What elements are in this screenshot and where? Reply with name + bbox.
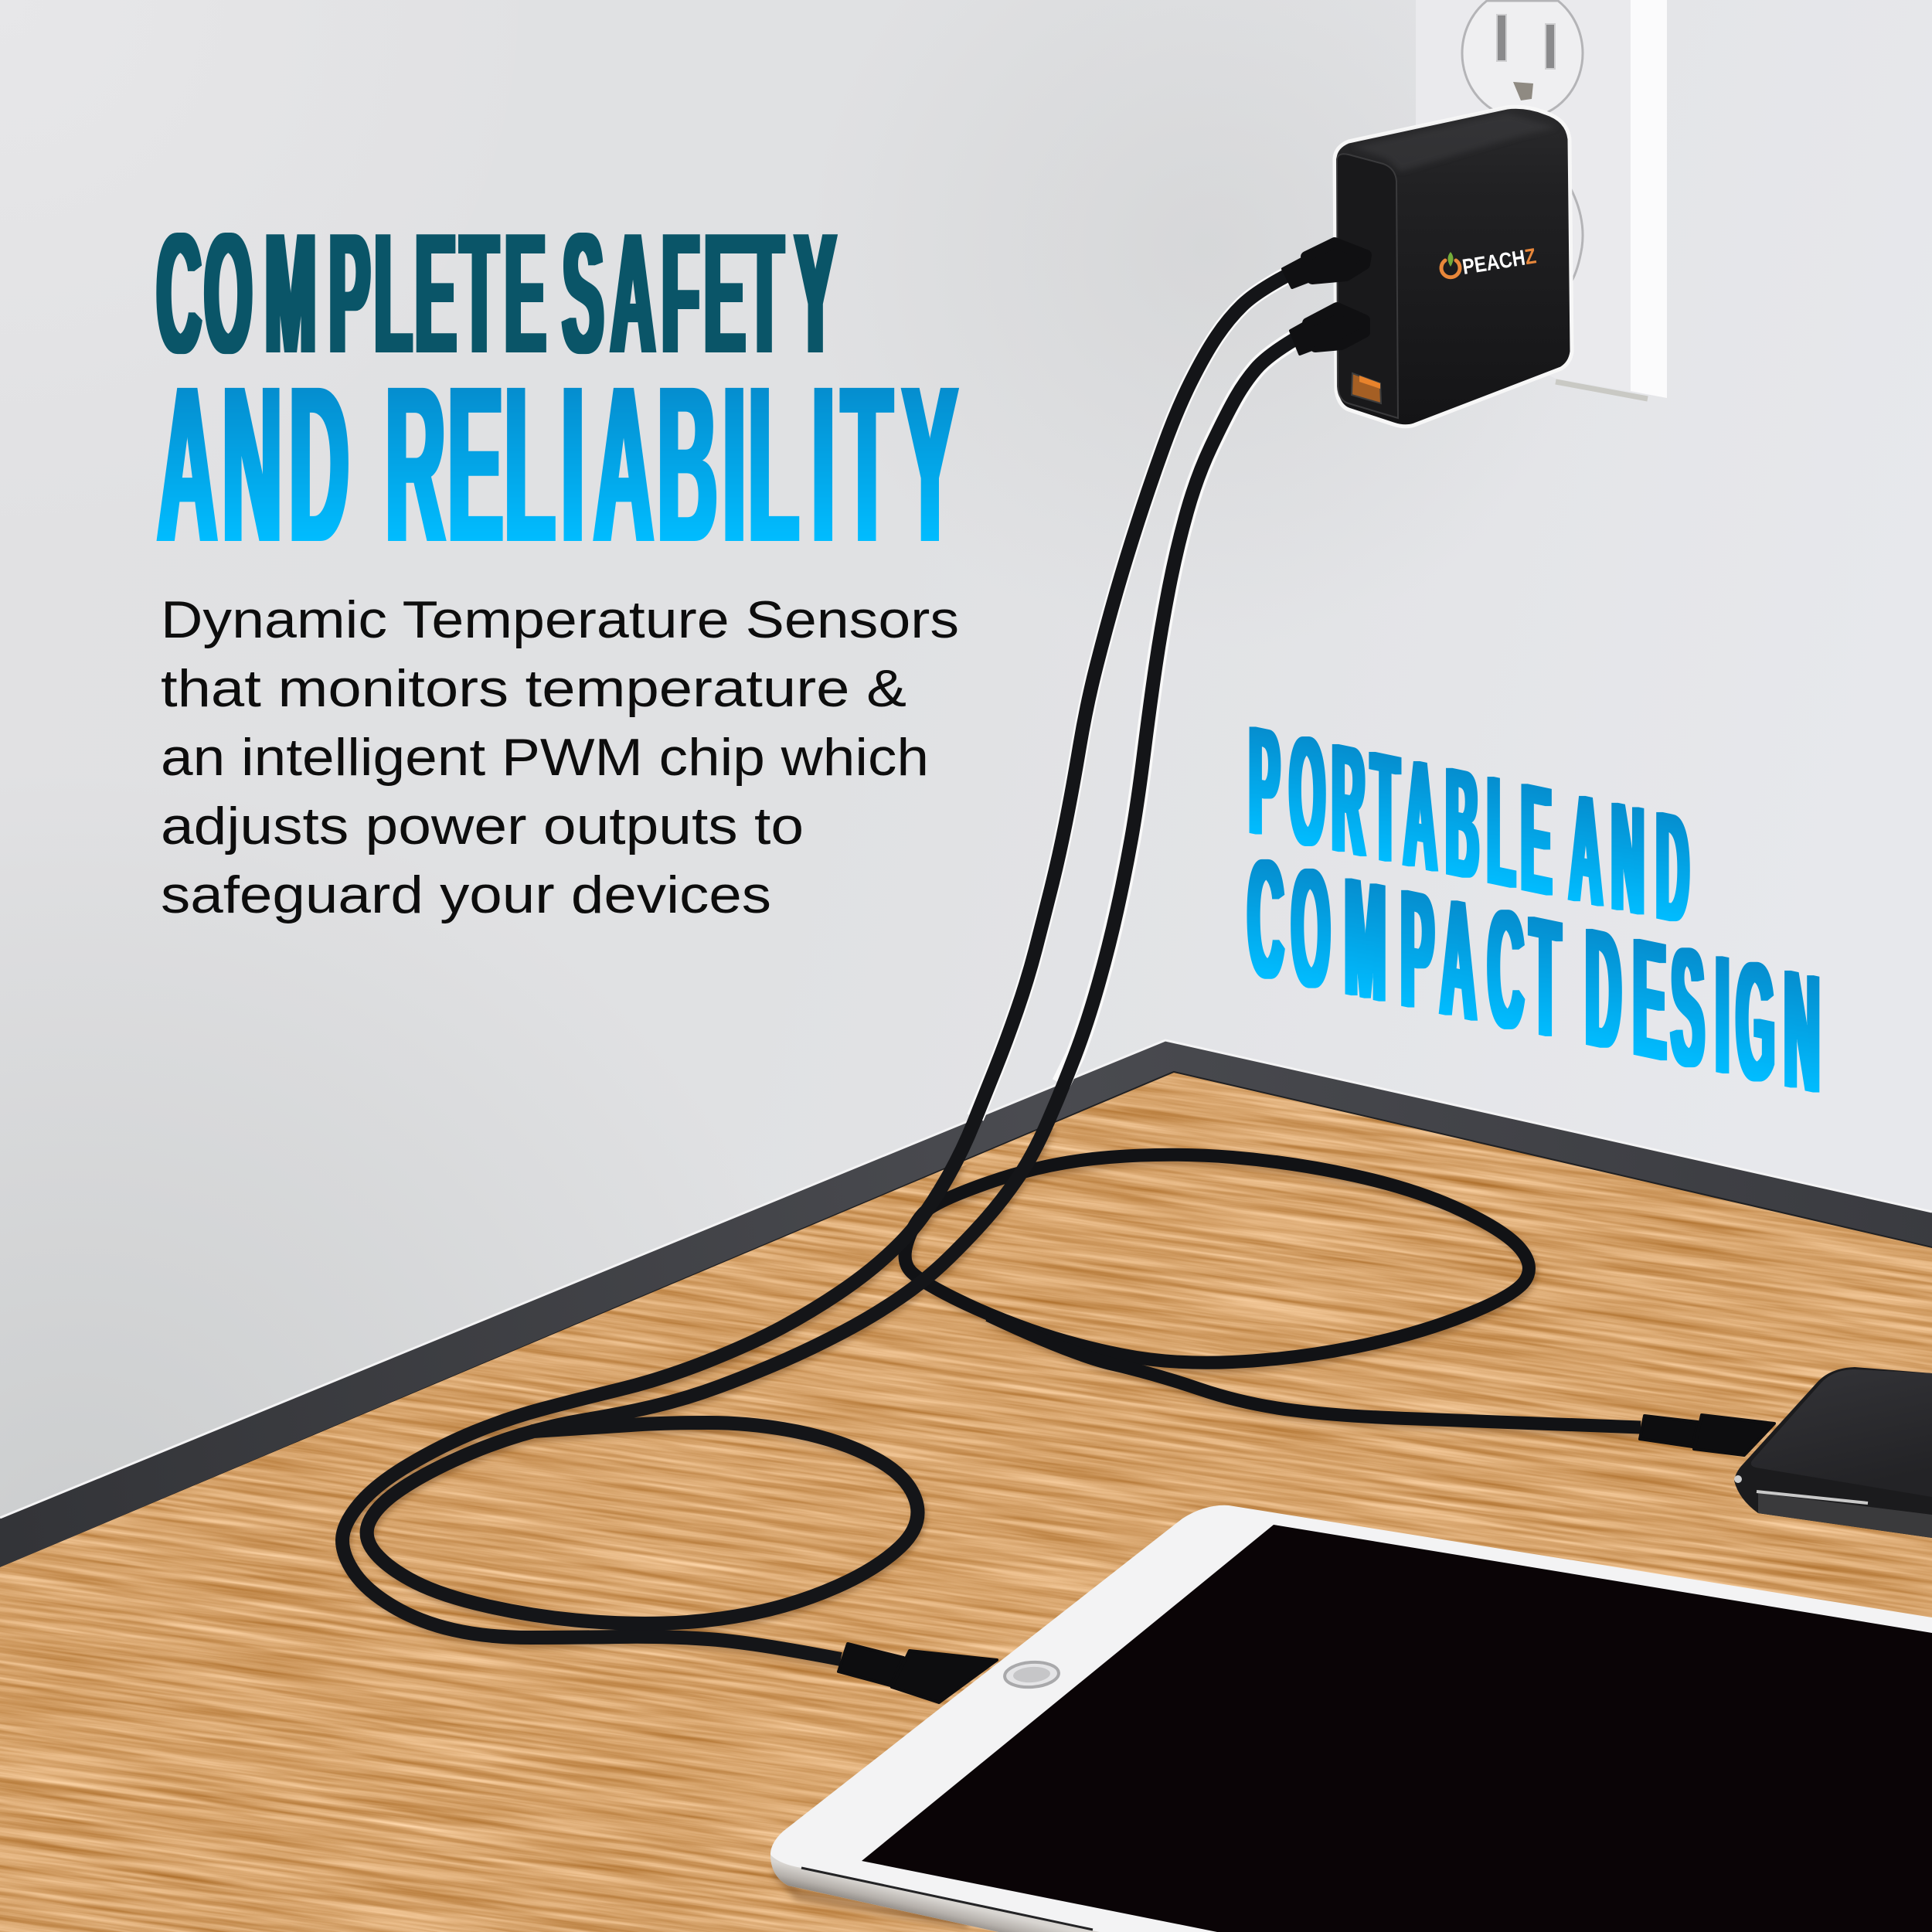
heading: portable and compact design: PORTABLE AND: [1250, 693, 1689, 958]
right cable loop: [905, 1155, 1529, 1362]
charger connectors: [1283, 243, 1366, 354]
body text: safeguard your devices: [161, 866, 771, 924]
brand name: PEACHZ: [1461, 243, 1538, 279]
cable to tablet: [342, 275, 1287, 1659]
heading: complete safety: COMPLETE SAFETY: [157, 198, 835, 389]
body text: [161, 590, 959, 924]
icon: home button: [1004, 1661, 1060, 1689]
body text: Dynamic Temperature Sensors: [161, 590, 959, 649]
body text: that monitors temperature &: [161, 659, 906, 718]
usb port: [1352, 373, 1381, 403]
icon: power symbol with leaf: [1441, 252, 1460, 277]
cable to phone: [988, 1315, 1641, 1427]
cable and tablet shadows on desk: [345, 1125, 1643, 1923]
tablet: [770, 1505, 1932, 1932]
body text: an intelligent PWM chip which: [161, 728, 929, 787]
tablet silver edge: [770, 1855, 1100, 1932]
phone connector: [1640, 1415, 1774, 1455]
cable white halo on wall: [975, 275, 1296, 1117]
wooden desk: [114, 1049, 1812, 1926]
wall plate with outlet: [1416, 0, 1667, 399]
tablet connector: [838, 1644, 997, 1702]
charger side face: [1337, 154, 1398, 418]
logo: peachz: [1441, 243, 1538, 279]
heading: portable and compact design: COMPACT DESIGN: [1248, 821, 1820, 1130]
charger top highlight: [1352, 113, 1557, 172]
heading: and reliability: AND RELIABILITY: [158, 340, 957, 589]
charger: [1283, 107, 1572, 427]
icon: outlet receptacle: [1462, 1, 1583, 282]
baseboard trim: [0, 1040, 1932, 1569]
body text: adjusts power outputs to: [161, 797, 804, 855]
tablet screen: [862, 1525, 1932, 1932]
phone: [1734, 1367, 1932, 1538]
cable with lower-left loop: [367, 338, 1296, 1624]
